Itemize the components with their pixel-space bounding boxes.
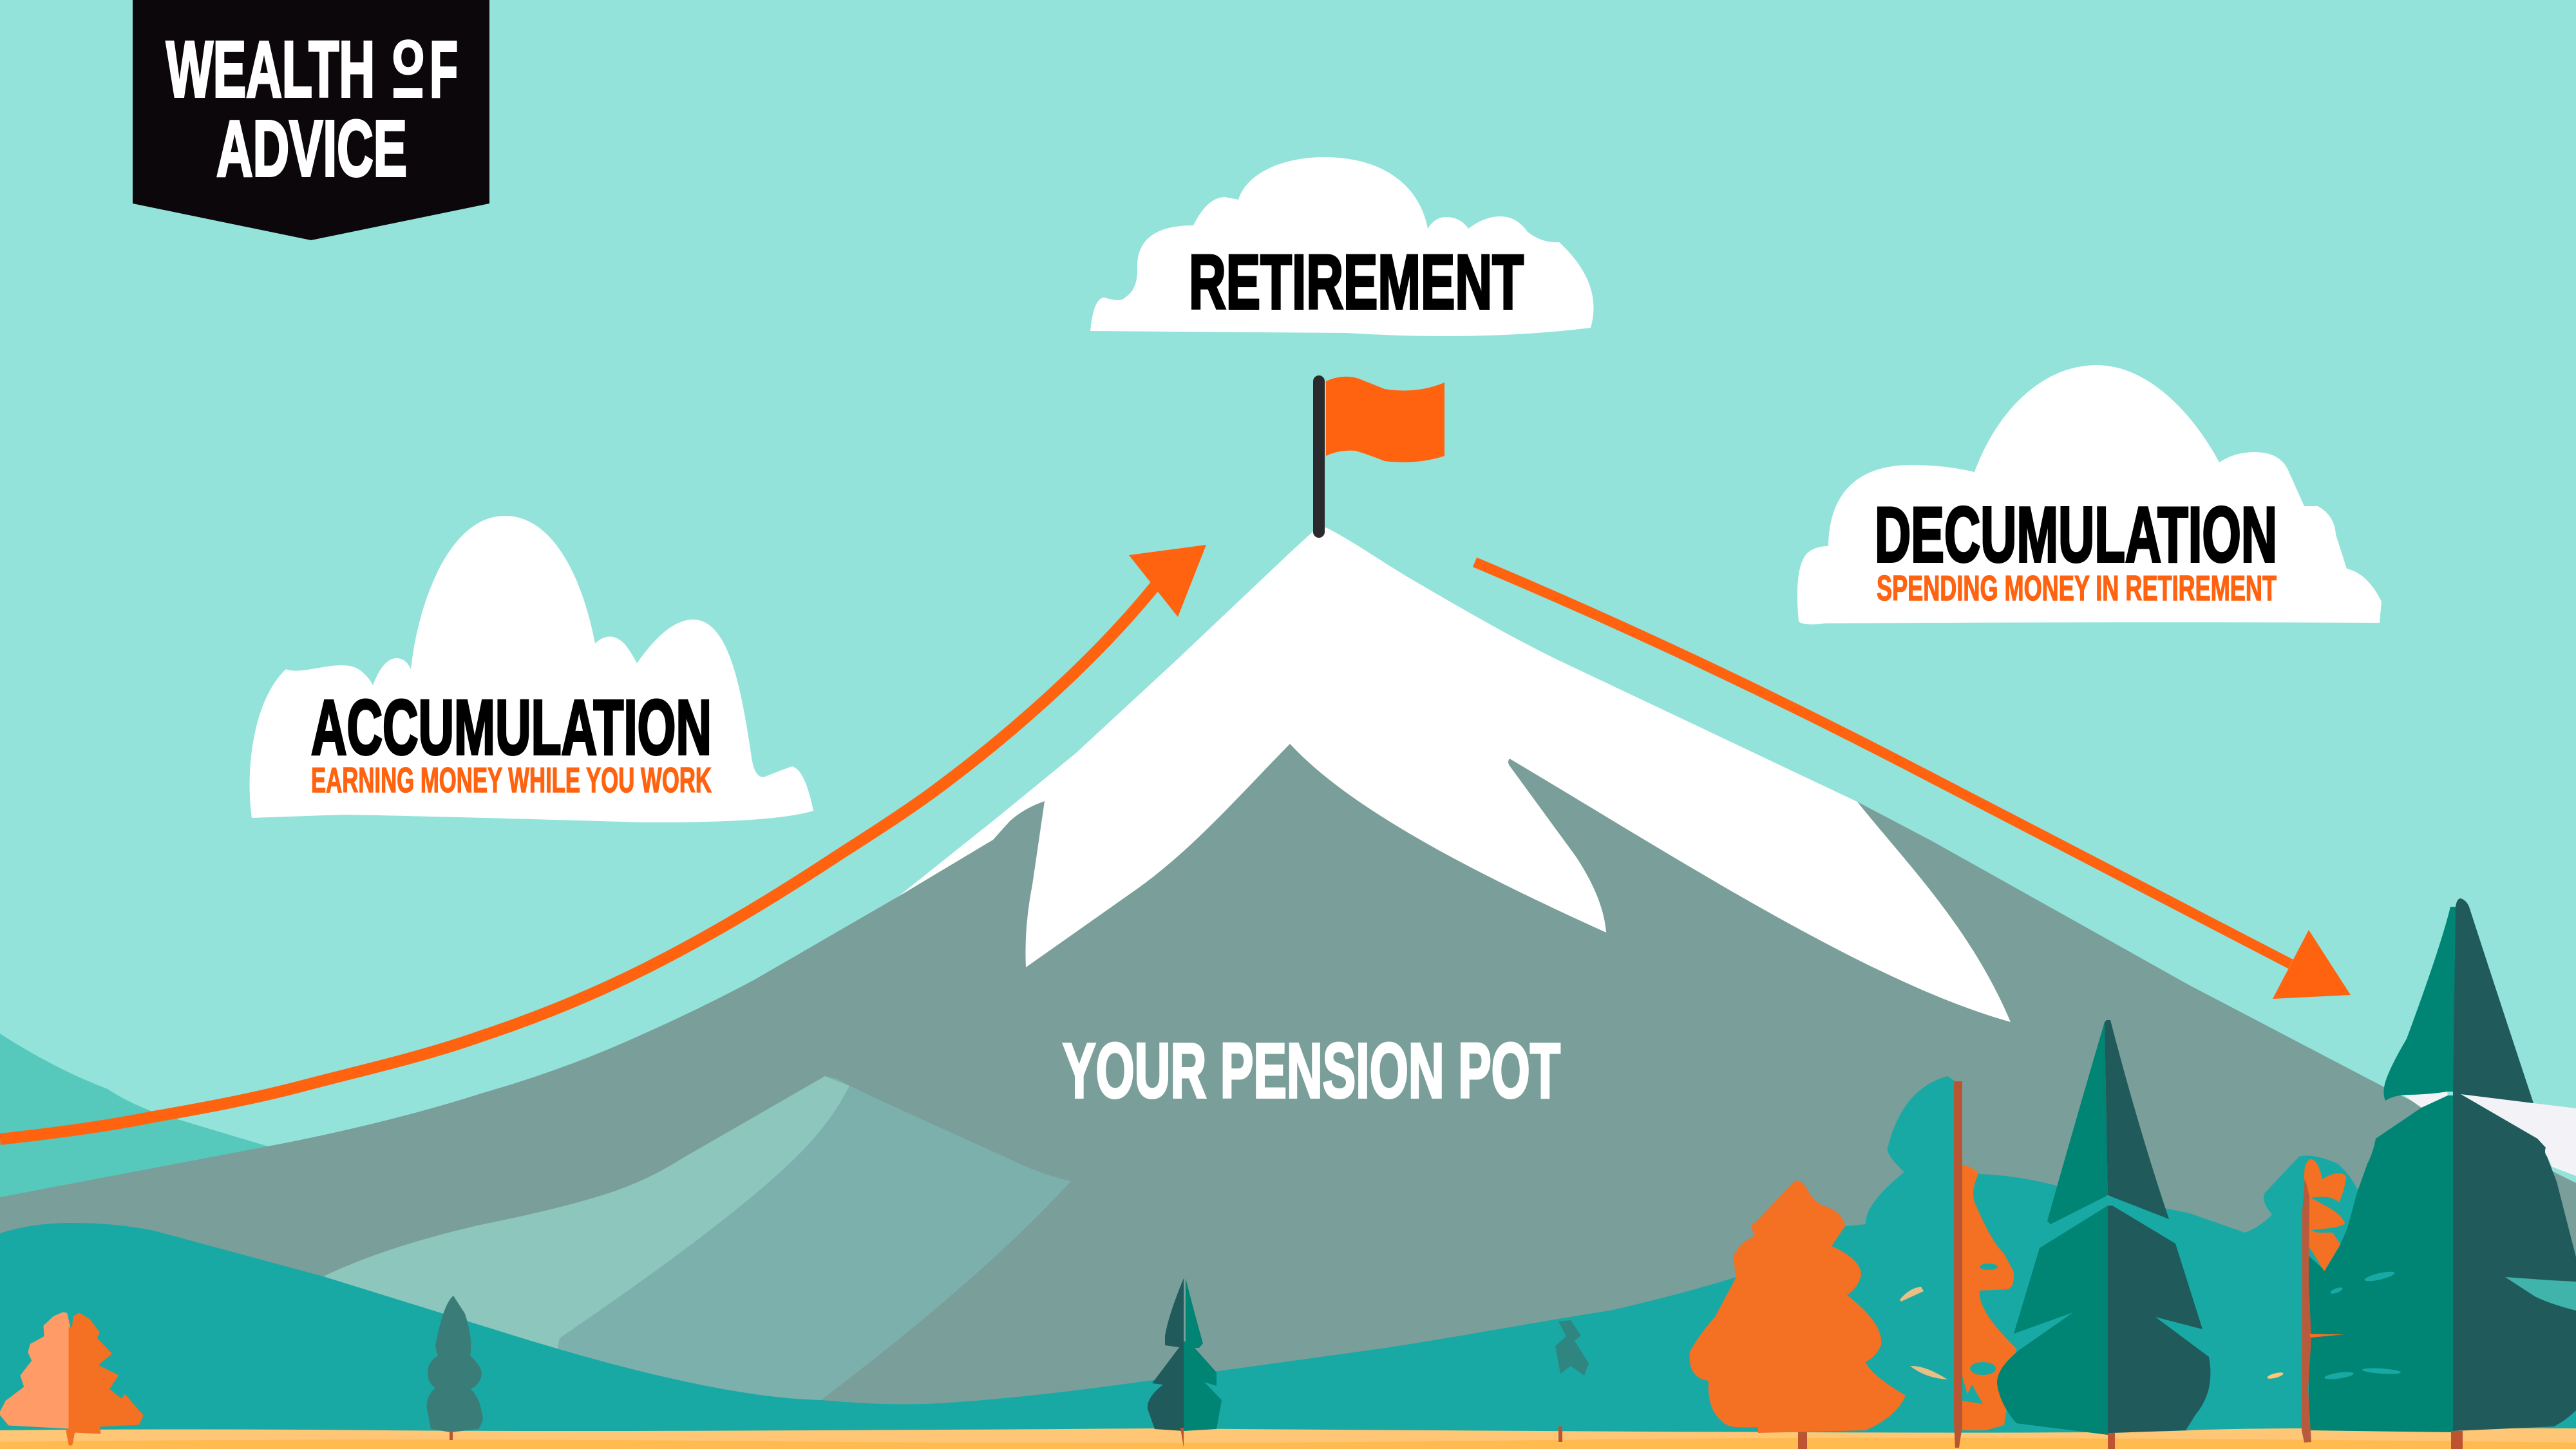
cloud: decumulation: SPENDING MONEY IN RETIREMENT — [1877, 568, 2277, 608]
tree: small green centre — [1148, 1278, 1222, 1448]
tree: green middle — [1997, 1020, 2210, 1449]
logo banner: WEALTH — [166, 26, 375, 114]
logo banner: ADVICE — [216, 105, 407, 193]
cloud: decumulation: DECUMULATION — [1875, 491, 2277, 578]
cloud: accumulation — [250, 516, 813, 822]
arrow: accumulation rising — [0, 545, 1206, 1139]
arrow: decumulation falling — [1475, 562, 2351, 999]
cloud: retirement — [1090, 157, 1593, 336]
tree: small teal left — [427, 1296, 483, 1440]
mountain snow cap — [898, 527, 2011, 1022]
snow patch behind big tree — [2404, 1092, 2576, 1176]
logo banner: F — [430, 26, 458, 114]
mountain — [0, 580, 2576, 1449]
tree: large orange — [1690, 1180, 1906, 1449]
cloud: retirement: RETIREMENT — [1189, 239, 1524, 325]
tree: big green right — [2309, 898, 2576, 1449]
falling leaves — [1900, 1287, 2284, 1380]
mountain label: YOUR PENSION POT — [1063, 1027, 1560, 1114]
back left hill — [0, 1034, 268, 1211]
sand ground — [0, 1428, 2576, 1449]
tree: thin orange right — [2302, 1159, 2346, 1443]
mountain medium face — [558, 1076, 1071, 1417]
tree: faint distant — [1555, 1320, 1589, 1442]
cloud: decumulation — [1797, 365, 2382, 624]
icon: summit flag — [1313, 375, 1444, 538]
logo banner — [133, 0, 489, 240]
cloud: accumulation: ACCUMULATION — [311, 683, 712, 771]
logo banner: O — [393, 32, 424, 84]
tree: half orange behind — [1954, 1081, 2016, 1448]
tree: small orange left — [0, 1313, 142, 1444]
cloud: accumulation: EARNING MONEY WHILE YOU WORK — [311, 760, 712, 800]
front teal hills — [0, 1076, 2576, 1449]
mountain light face — [323, 1076, 849, 1349]
